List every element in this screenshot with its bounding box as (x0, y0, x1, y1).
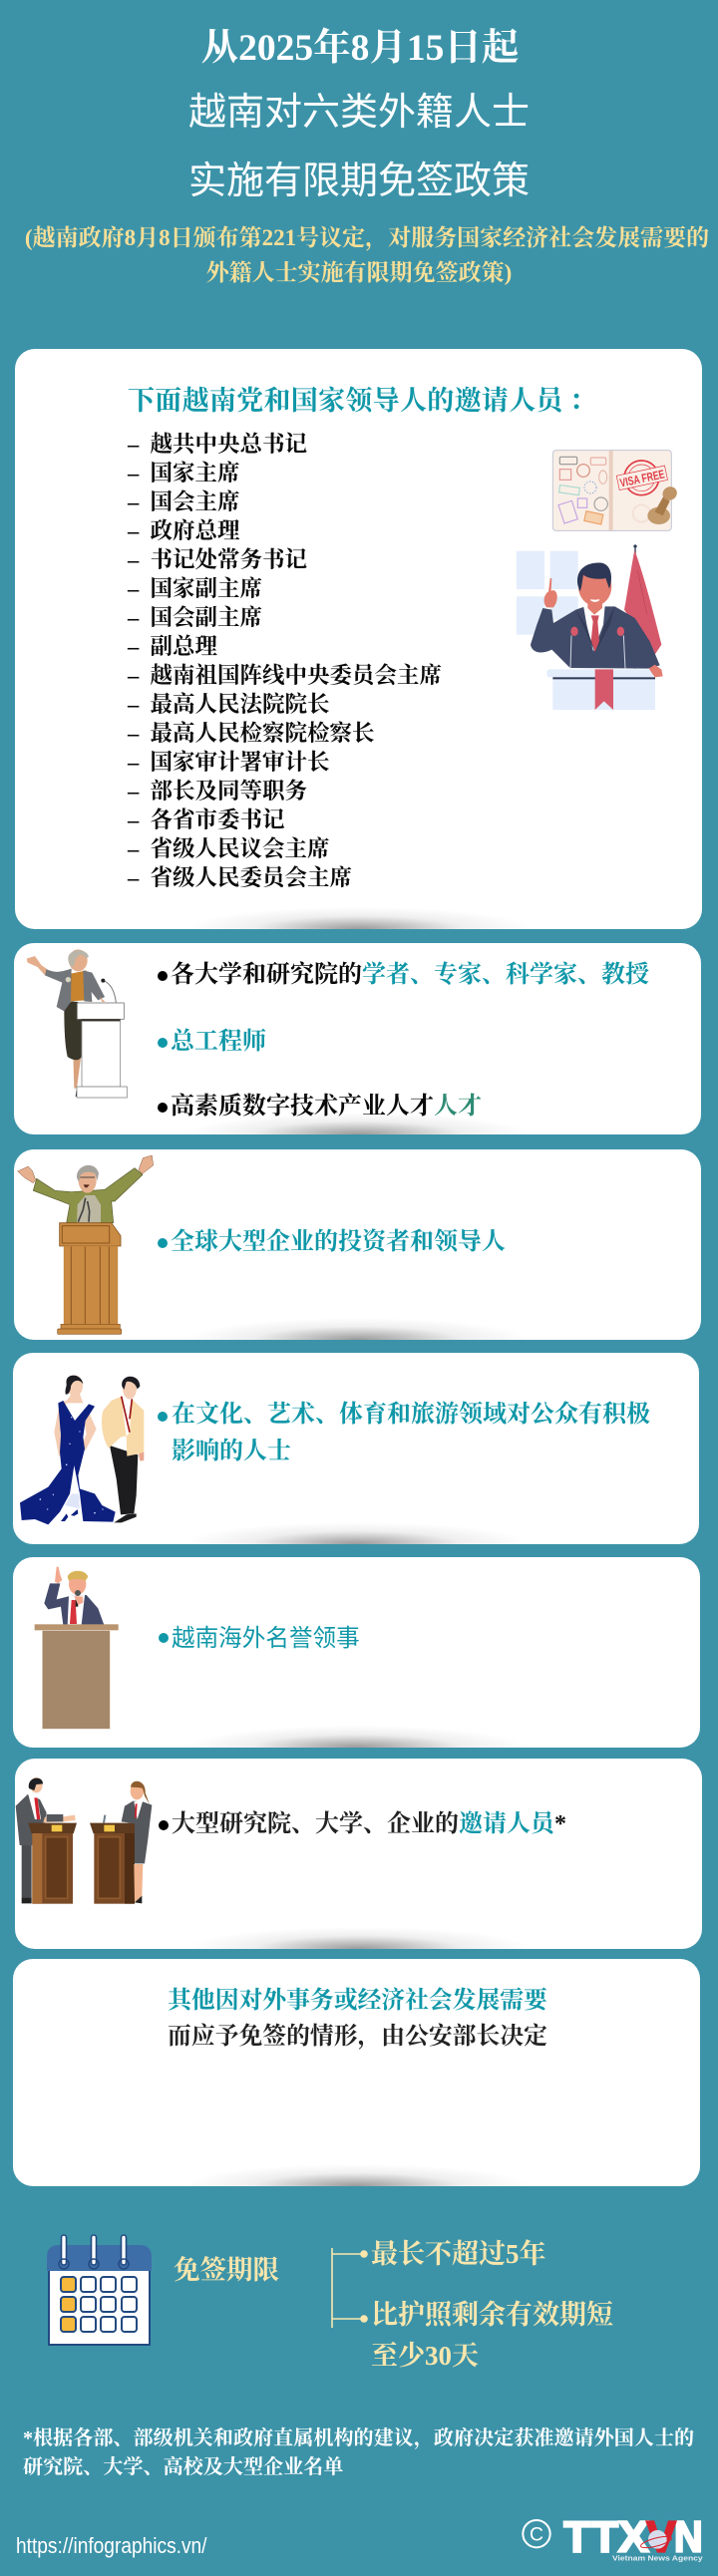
text: visa-free period details: 至少30天 (371, 2341, 479, 2371)
text: visa-free period details (371, 2239, 613, 2371)
panel: other cases decided by minister of public security (13, 1959, 700, 2186)
text: other cases: 其他因对外事务或经济社会发展需要 (168, 1988, 547, 2014)
icon: man speaking at podium with flag (517, 544, 663, 710)
icon: woman with raised arms at wooden podium (18, 1154, 154, 1335)
text: other cases (168, 1987, 547, 2050)
list of leaders: 越南祖国阵线中央委员会主席 (150, 663, 442, 688)
panel: influential public figures (13, 1353, 699, 1544)
panel: party and state leaders' invitees (15, 349, 702, 929)
list of leaders: – (128, 750, 139, 775)
list of leaders: – (128, 576, 139, 601)
footnote (23, 2426, 694, 2478)
list of leaders: – (128, 432, 139, 457)
icon: visa free passport and stamp (552, 450, 677, 531)
panel: scholars, chief engineers, digital talent (14, 943, 701, 1134)
icon: visa free passport and stamp: VISA FREE (618, 467, 666, 490)
panel: honorary consuls (13, 1557, 700, 1748)
list of leaders: – (128, 721, 139, 746)
footnote: *根据各部、部级机关和政府直属机构的建议，政府决定获准邀请外国人士的 (23, 2427, 694, 2449)
text: other cases: 而应予免签的情形，由公安部长决定 (168, 2024, 547, 2050)
logo: TTXVN Vietnam News Agency: T (563, 2513, 590, 2561)
subtitle: 外籍人士实施有限期免签政策) (206, 260, 512, 285)
logo: TTXVN Vietnam News Agency (522, 2513, 704, 2563)
list of leaders: 最高人民法院院长 (150, 692, 330, 717)
list of leaders: – (128, 692, 139, 717)
subtitle: (越南政府8月8日颁布第221号议定，对服务国家经济社会发展需要的 (25, 225, 709, 250)
logo: TTXVN Vietnam News Agency: C (530, 2525, 543, 2546)
list of leaders: 省级人民委员会主席 (150, 865, 352, 890)
list of leaders: 最高人民检察院检察长 (150, 721, 375, 746)
list of leaders: – (128, 634, 139, 659)
list of leaders: – (128, 605, 139, 630)
list of leaders: – (128, 865, 139, 890)
list of leaders: 政府总理 (150, 518, 240, 543)
panel: global investors and leaders (14, 1149, 701, 1340)
text: visa-free period details: 比护照剩余有效期短 (371, 2300, 613, 2330)
list of leaders: 部长及同等职务 (150, 779, 307, 804)
icon: woman at white lectern (26, 949, 128, 1099)
list of leaders: 国会副主席 (150, 605, 262, 630)
title (188, 27, 530, 204)
logo: TTXVN Vietnam News Agency: V (646, 2513, 676, 2561)
text: visa-free period details: 最长不超过5年 (371, 2239, 546, 2269)
list of leaders: – (128, 547, 139, 572)
list of leaders: 越共中央总书记 (150, 432, 307, 457)
item: honorary consuls of Vietnam abroad: 越南海外名誉领事 (172, 1619, 360, 1653)
list of leaders: – (128, 518, 139, 543)
list of leaders (128, 432, 442, 890)
icon: woman in blue gown and man in cream jacket (20, 1375, 144, 1525)
item: global investors: 全球大型企业的投资者和领导人 (171, 1229, 506, 1255)
list of leaders: – (128, 489, 139, 514)
title: 越南对六类外籍人士 (188, 81, 530, 136)
icon: man and woman at wooden podiums (16, 1777, 152, 1904)
item: scholars and experts: 各大学和研究院的学者、专家、科学家、教授 (171, 962, 649, 988)
list of leaders: 省级人民议会主席 (150, 836, 330, 861)
title: 实施有限期免签政策 (188, 150, 530, 204)
item: invitees of large institutions: 大型研究院、大学、企业的邀请人员* (172, 1811, 566, 1837)
logo: TTXVN Vietnam News Agency: Vietnam News Agency (612, 2554, 704, 2563)
list of leaders: – (128, 807, 139, 832)
list of leaders: – (128, 461, 139, 485)
item: cultural and public figures: 影响的人士 (172, 1439, 291, 1464)
bracket connector (331, 2248, 368, 2328)
logo: TTXVN Vietnam News Agency: X (618, 2513, 649, 2561)
logo: TTXVN Vietnam News Agency: T (591, 2513, 618, 2561)
panel: invitees of research institutes, universities and enterprises (15, 1759, 702, 1949)
heading: 下面越南党和国家领导人的邀请人员： (128, 386, 596, 416)
list of leaders: 国家审计署审计长 (150, 750, 330, 775)
icon: calendar (47, 2234, 152, 2346)
list of leaders: 国家主席 (150, 461, 240, 485)
heading: visa-free period: 免签期限 (174, 2255, 279, 2285)
list of leaders: – (128, 779, 139, 804)
subtitle (25, 225, 709, 285)
list of leaders: 书记处常务书记 (150, 547, 307, 572)
title: 从2025年8月15日起 (201, 28, 519, 69)
list of leaders: 副总理 (150, 634, 217, 659)
item: cultural and public figures: 在文化、艺术、体育和旅游领域对公众有积极 (172, 1402, 650, 1428)
item: cultural and public figures (158, 1401, 650, 1464)
list of leaders: 国会主席 (150, 489, 240, 514)
item: chief engineers: 总工程师 (171, 1029, 266, 1055)
list of leaders: 国家副主席 (150, 576, 262, 601)
list of leaders: – (128, 836, 139, 861)
item: digital technology talent: 高素质数字技术产业人才人才 (171, 1094, 482, 1120)
list of leaders: – (128, 663, 139, 688)
source URL: https://infographics.vn/ (16, 2533, 207, 2558)
logo: TTXVN Vietnam News Agency: N (674, 2513, 703, 2561)
list of leaders: 各省市委书记 (150, 807, 285, 832)
icon: man with microphone at brown podium (34, 1567, 119, 1730)
footnote: 研究院、大学、高校及大型企业名单 (23, 2456, 343, 2478)
